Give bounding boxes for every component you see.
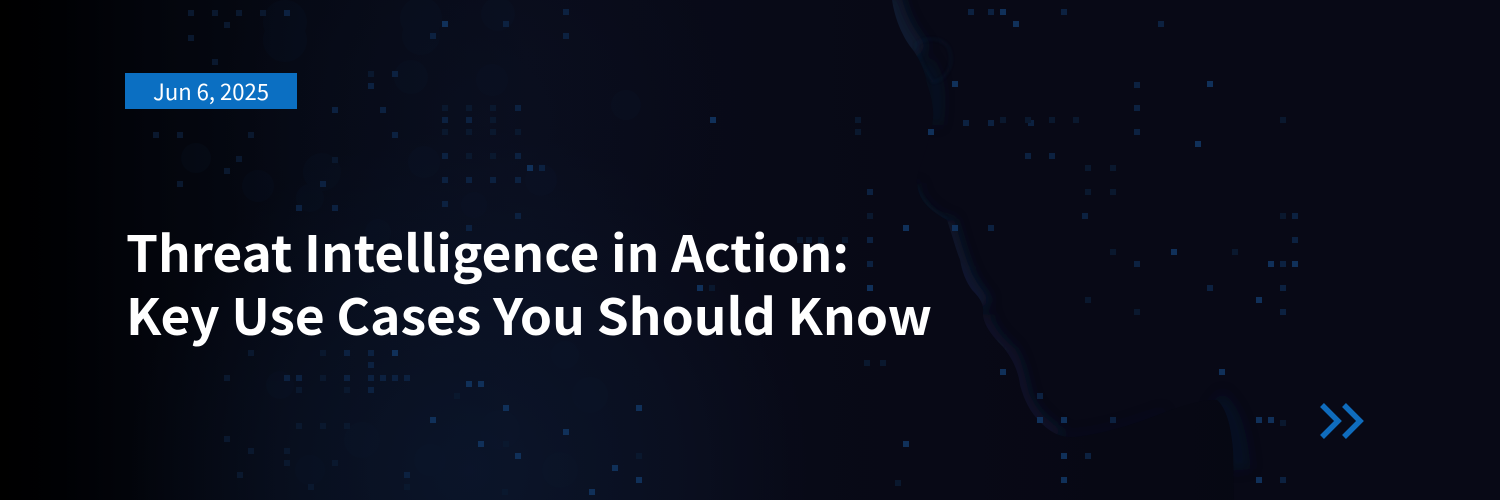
bright dots — [392, 9, 1298, 495]
face silhouette — [892, 0, 1500, 500]
bokeh circles — [181, 0, 641, 488]
date badge — [125, 73, 297, 109]
dot grid — [153, 9, 1298, 495]
faint dots — [153, 10, 1286, 495]
title — [126, 215, 932, 350]
icon: double chevron arrow — [1322, 405, 1360, 437]
title: Threat Intelligence in Action: — [126, 215, 849, 287]
title: Key Use Cases You Should Know — [126, 278, 932, 350]
medium dots — [284, 9, 1298, 483]
date badge: Jun 6, 2025 — [153, 75, 269, 107]
